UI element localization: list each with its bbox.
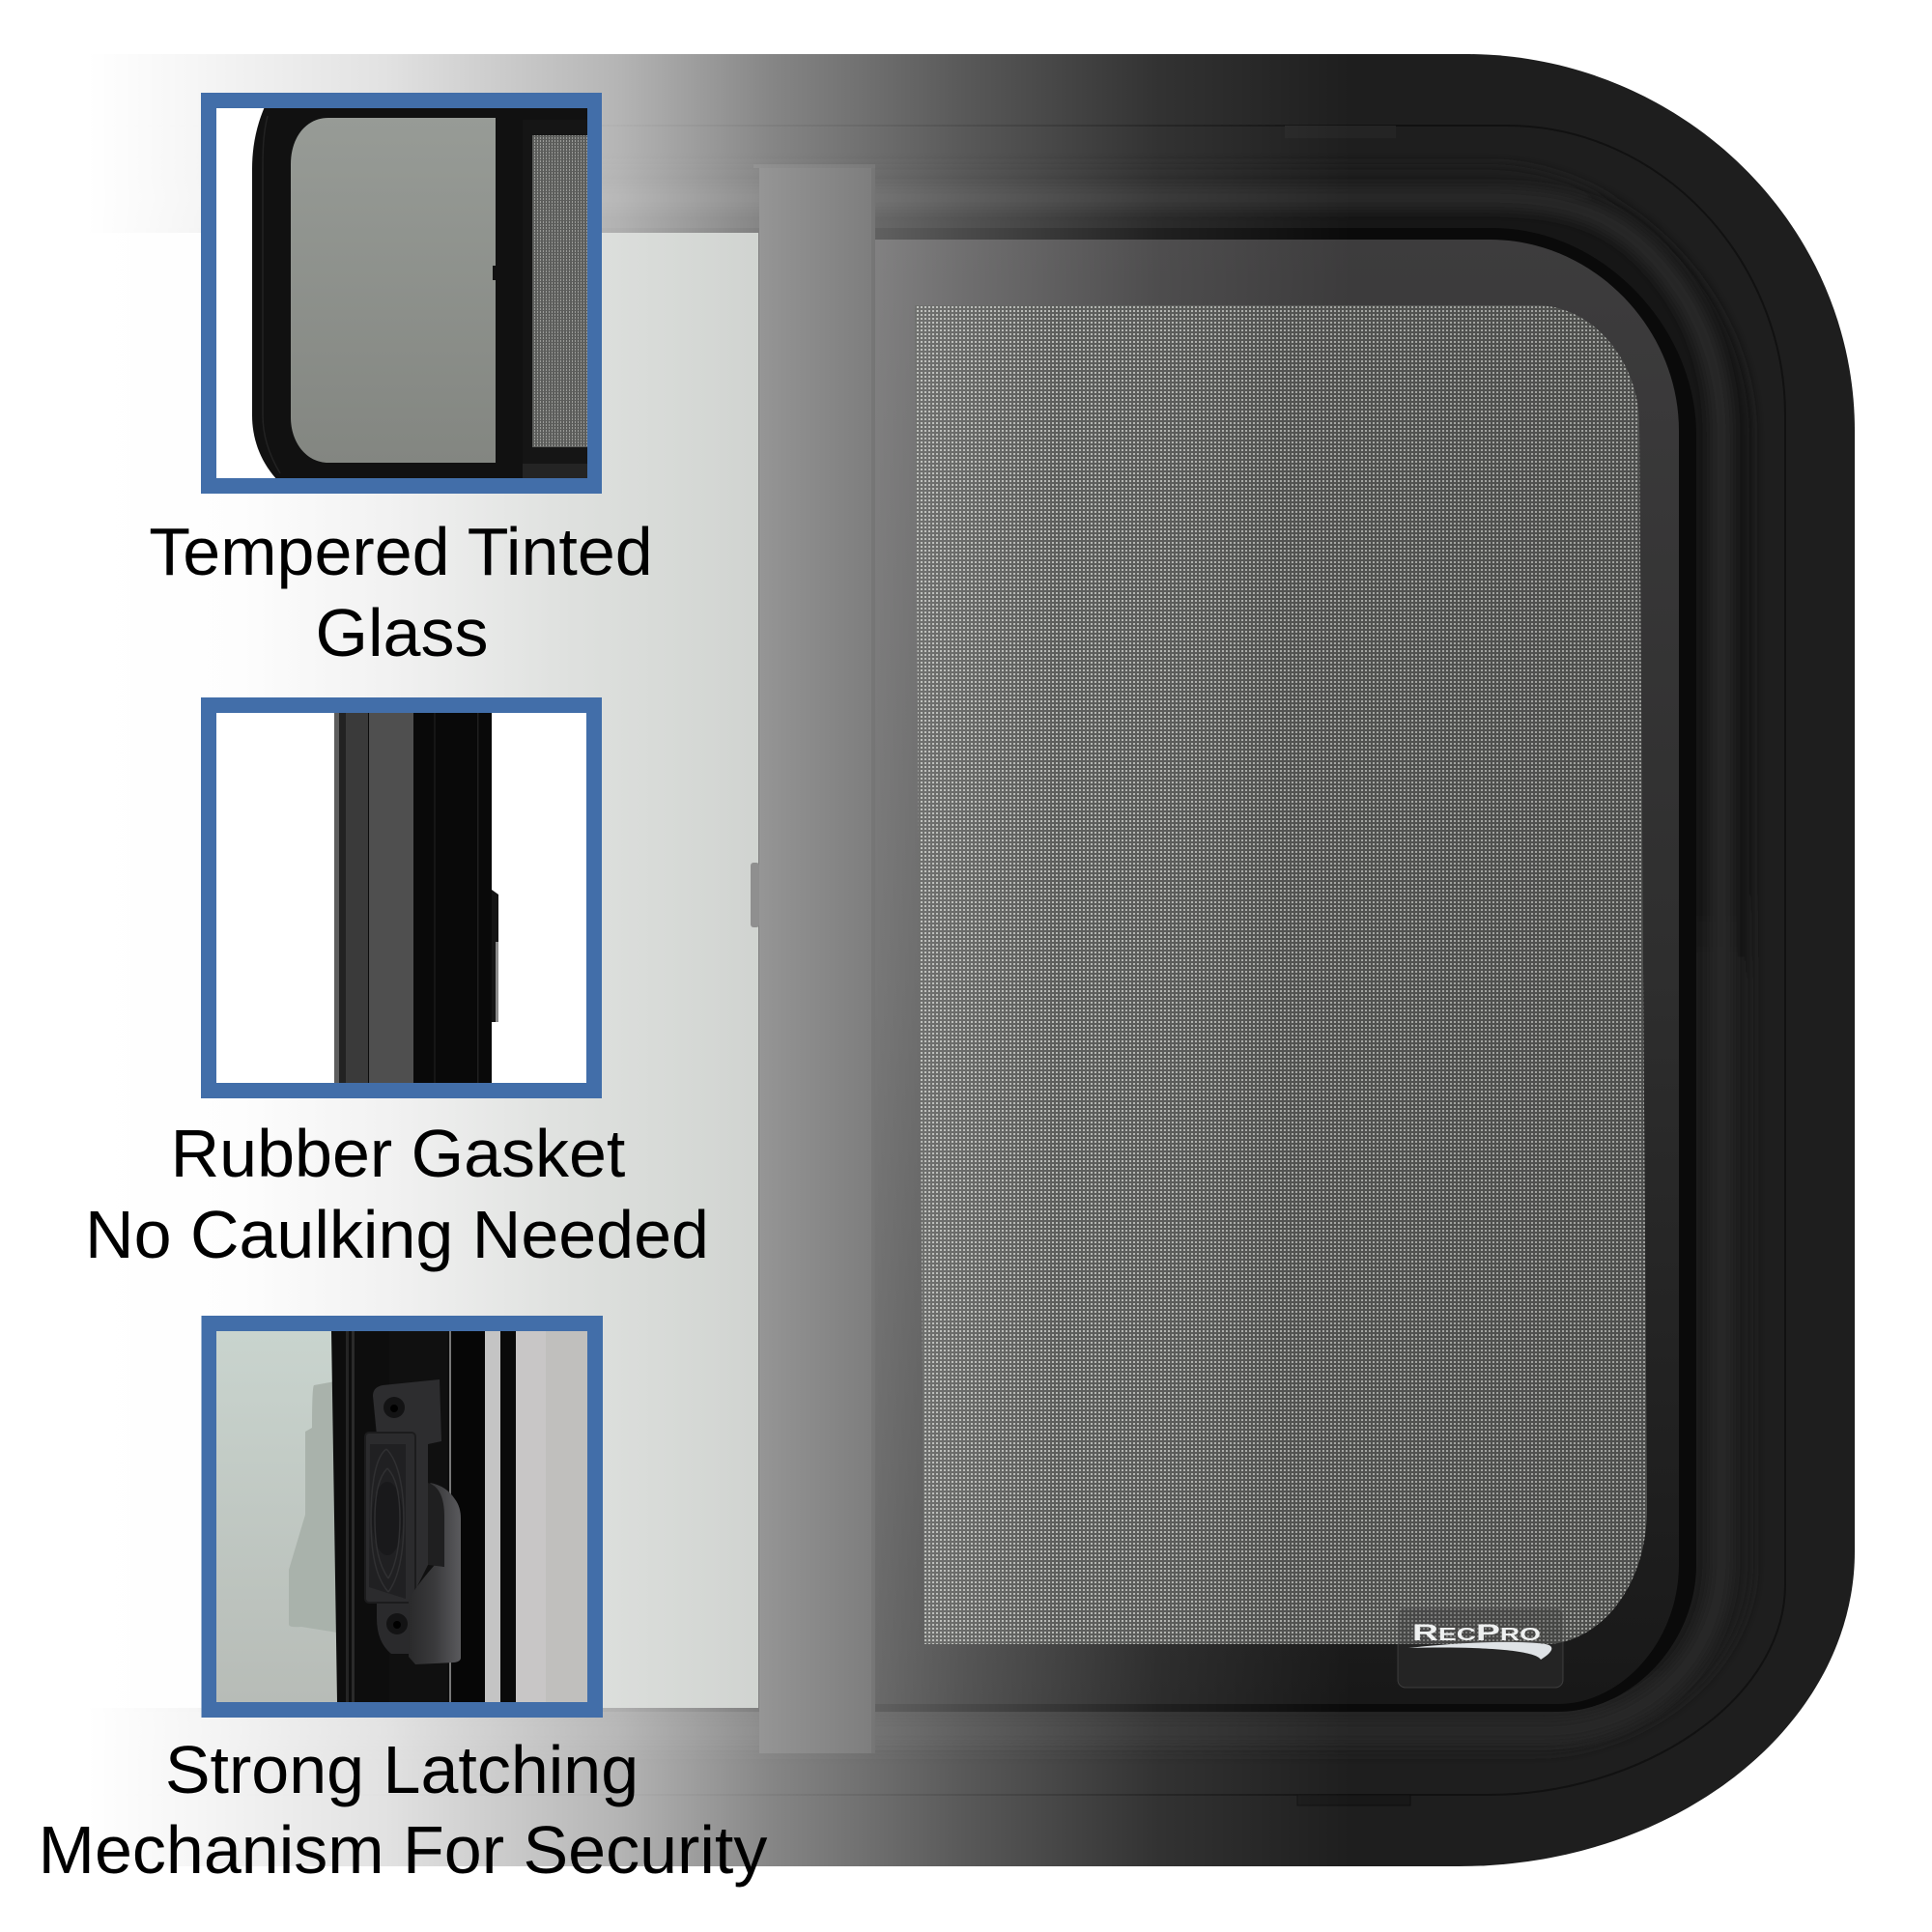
inset photo — [252, 97, 599, 483]
glass latch silhouette — [751, 863, 759, 927]
caption: rubber gasket: Rubber Gasket — [171, 1116, 625, 1191]
inset border — [209, 1323, 595, 1710]
caption: strong latching: Strong Latching — [165, 1732, 639, 1807]
panel: rubber gasket — [209, 705, 594, 1092]
left edge artifact lines — [0, 64, 2, 1861]
latch body — [365, 1379, 461, 1664]
RecPro logo sticker — [1398, 1607, 1563, 1688]
caption: mechanism for security: Mechanism For Security — [39, 1812, 767, 1888]
bottom clip tab — [1297, 1795, 1410, 1805]
inset border — [209, 705, 594, 1091]
caption: glass: Glass — [316, 595, 488, 670]
inset photo — [216, 1331, 587, 1702]
right mesh screen — [915, 305, 1647, 1644]
caption: no caulking needed: No Caulking Needed — [85, 1197, 709, 1272]
outer ridge line — [58, 126, 1785, 1795]
left clear glass pane — [58, 233, 758, 1708]
rubber bevel highlight — [58, 198, 1721, 1731]
window inner channel — [58, 164, 1753, 1752]
inner gasket shadow — [58, 228, 1696, 1712]
panel: tempered tinted glass — [209, 97, 599, 486]
inset border — [209, 100, 594, 486]
logo swoosh — [1408, 1642, 1551, 1660]
inset photo — [334, 705, 498, 1092]
panel: strong latching mechanism — [209, 1323, 595, 1710]
center mullion — [753, 164, 875, 1753]
screen frame — [875, 240, 1679, 1704]
RecPro wordmark: R EC P RO — [1412, 1620, 1541, 1646]
top clip tab — [1285, 126, 1396, 138]
caption: tempered tinted glass: Tempered Tinted — [149, 514, 653, 589]
